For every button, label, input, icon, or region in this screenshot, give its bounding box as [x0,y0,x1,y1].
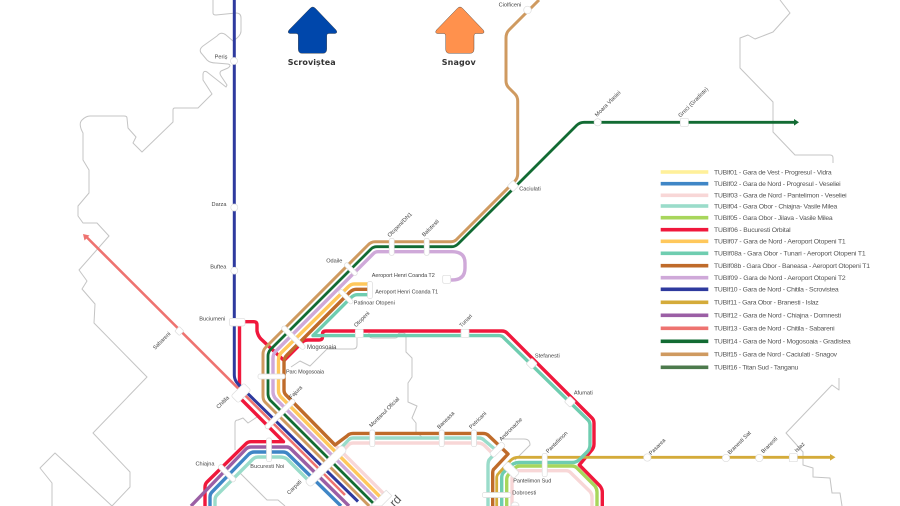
line: TUBIf02 blue [210,452,341,506]
station labels: Fajura [289,384,305,401]
legend: TUBIf01: TUBIf01 - Gara de Vest - Progresul - Vidra [714,169,832,176]
station labels: Chitila [216,395,232,410]
legend: TUBIf16: TUBIf16 - Titan Sud - Tanganu [714,365,799,372]
station labels: Caciulati [519,187,541,193]
line: TUBIf12 purple [191,447,349,506]
line: TUBIf04 aqua west [215,457,312,506]
legend [661,169,870,372]
line: TUBIf04 aqua east [340,438,497,506]
label: Scroviștea: Scroviștea [288,58,336,68]
line: TUBIf13 Chitila Sabareni [83,234,345,495]
legend: TUBIf11 [661,300,819,307]
legend: TUBIf10 [661,287,839,294]
station labels: Tunari [459,314,474,329]
station labels: Stefanesti [535,353,560,359]
legend: TUBIf09: TUBIf09 - Gara de Nord - Aeroport Otopeni T2 [714,275,846,282]
line: TUBIf08b brown [284,289,508,506]
label: Snagov: Snagov [442,58,476,67]
line: TUBIf03 pink south [512,471,592,506]
station labels: Chiajna [196,461,215,467]
line: TUBIf15 tan [263,0,539,506]
legend: TUBIf08b: TUBIf08b - Gara Obor - Baneasa - Aeroport Otopeni T1 [714,263,870,270]
station labels: Petricani [468,411,488,431]
line: TUBIf10 Chitila Scrovistea [234,0,358,502]
legend: TUBIf13 [661,326,835,333]
green arrow head [794,119,799,126]
legend: TUBIf01 [661,169,832,176]
legend: TUBIf06 [661,227,791,234]
station labels: Islaz [794,441,807,454]
line: TUBIf11 mustard [497,454,836,506]
station labels: Andronache [499,417,524,443]
station labels: Branesti Sat [727,430,753,456]
line: TUBIf08a aqua [313,295,590,506]
legend: TUBIf03: TUBIf03 - Gara de Nord - Pantelimon - Veseliei [714,193,847,200]
station labels [152,3,807,497]
legend: TUBIf07: TUBIf07 - Gara de Nord - Aeroport Otopeni T1 [714,239,846,246]
legend: TUBIf16 [661,365,799,372]
legend: TUBIf14: TUBIf14 - Gara de Nord - Mogosoaia - Gradistea [714,339,851,346]
station labels: Carpati [286,479,303,496]
station labels: Aeroport Henri Coanda T2 [372,273,435,279]
legend: TUBIf11: TUBIf11 - Gara Obor - Branesti - Islaz [714,300,819,307]
station labels: Balotesti [421,219,441,238]
legend: TUBIf04 [661,203,838,210]
legend: TUBIf12: TUBIf12 - Gara de Nord - Chiajna - Domnesti [714,313,841,320]
station labels: Pantelimon Sud [513,478,551,484]
line: TUBIf05 lime [507,466,597,506]
legend: TUBIf08a: TUBIf08a - Gara Obor - Tunari - Aeroport Otopeni T1 [714,251,866,258]
station labels: Pasarea [648,437,668,457]
icon: Scrovistea arrow [288,7,337,53]
station labels: Otopeni [353,311,371,329]
station labels: Aeroport Henri Coanda T1 [375,290,438,296]
station labels: Mogosoaia [307,345,337,351]
station labels: Parc Mogosoaia [286,370,325,376]
legend: TUBIf05: TUBIf05 - Gara Obor - Jilava - Vasile Milea [714,215,833,222]
station labels: Otopeni/DN1 [387,212,414,239]
station labels: Odaile [326,259,342,265]
station labels: Periș [215,55,228,61]
station labels: Montanul Oficial [368,396,401,429]
station labels: Bucuresti Noi [250,464,284,470]
station labels: Buftea [210,265,227,271]
legend: TUBIf13: TUBIf13 - Gara de Nord - Chitila - Sabareni [714,326,835,333]
line: TUBIf03 pink [335,443,495,496]
legend: TUBIf15: TUBIf15 - Gara de Nord - Caciulati - Snagov [714,352,838,359]
station labels: Ciolficeni [499,3,521,9]
station labels: Darza [212,202,227,208]
station labels: Greci (Gradiste) [678,87,710,119]
line: TUBIf07 yellow [278,284,383,499]
line: TUBIf06 orbital north and east [245,322,602,506]
station labels: Moara Vlasiei [594,90,622,118]
station labels: Pantelimon [545,431,569,455]
station labels: Afumati [574,390,593,396]
icon: Snagov arrow [436,7,484,53]
legend: TUBIf04: TUBIf04 - Gara Obor - Chiajna- Vasile Milea [714,203,838,210]
station labels: Baneasa [436,410,457,431]
station labels: Branesti [760,436,779,455]
stations [175,6,797,506]
legend: TUBIf10: TUBIf10 - Gara de Nord - Chitila - Scrovistea [714,287,839,294]
legend: TUBIf02: TUBIf02 - Gara de Nord - Progresul - Veseliei [714,181,841,188]
station labels: Patinoar Otopeni [354,301,395,307]
station labels: Sabareni [152,331,172,351]
legend: TUBIf06: TUBIf06 - Bucuresti Orbital [714,227,791,234]
line: TUBIf09 lilac [273,252,465,503]
legend: TUBIf15 [661,352,838,359]
legend: TUBIf05 [661,215,833,222]
station labels: Buciumeni [199,316,225,322]
station labels: Dobroesti [512,491,536,497]
line: TUBIf14 green [268,122,795,506]
line: TUBIf06 orbital red [205,322,284,506]
